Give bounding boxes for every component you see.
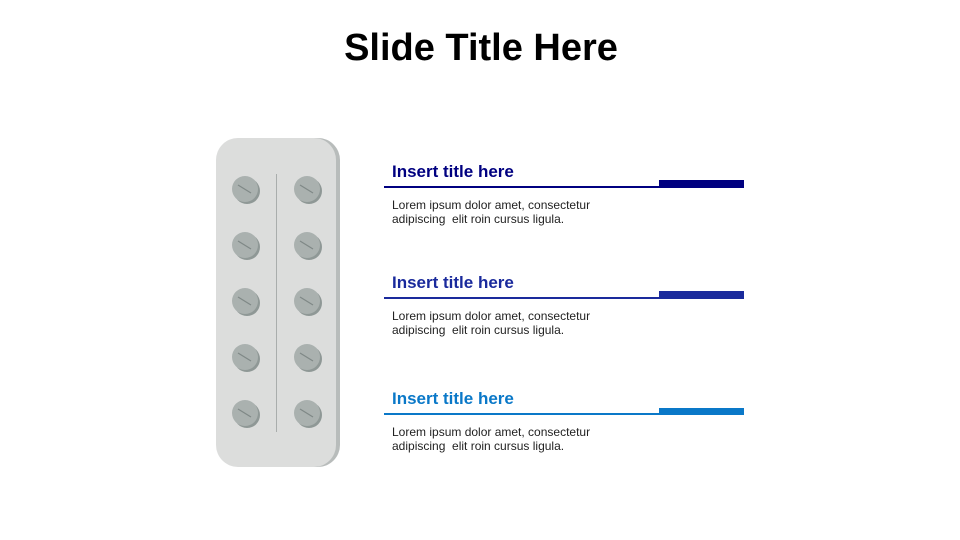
item 3 text: adipiscing elit roin cursus ligula. [392,439,564,453]
item 2 text: Lorem ipsum dolor amet, consectetur [392,309,590,323]
item 3 title: Insert title here [392,389,514,408]
item 2 text [392,309,590,337]
item 2 title: Insert title here [392,273,514,292]
item 1 title: Insert title here [392,162,514,181]
item 3 bar [659,408,744,415]
item 1 text: Lorem ipsum dolor amet, consectetur [392,198,590,212]
item 2 rule [384,297,744,299]
item 2 [384,273,744,337]
item 3 rule [384,413,744,415]
item 2 text: adipiscing elit roin cursus ligula. [392,323,564,337]
item 2 bar [659,291,744,299]
item 1 text: adipiscing elit roin cursus ligula. [392,212,564,226]
item 3 text [392,425,590,453]
title: Slide Title Here [344,27,618,69]
item 1 text [392,198,590,226]
item 1 rule [384,186,744,188]
item 3 [384,389,744,453]
item 1 [384,162,744,226]
item 3 text: Lorem ipsum dolor amet, consectetur [392,425,590,439]
item 1 bar [659,180,744,188]
